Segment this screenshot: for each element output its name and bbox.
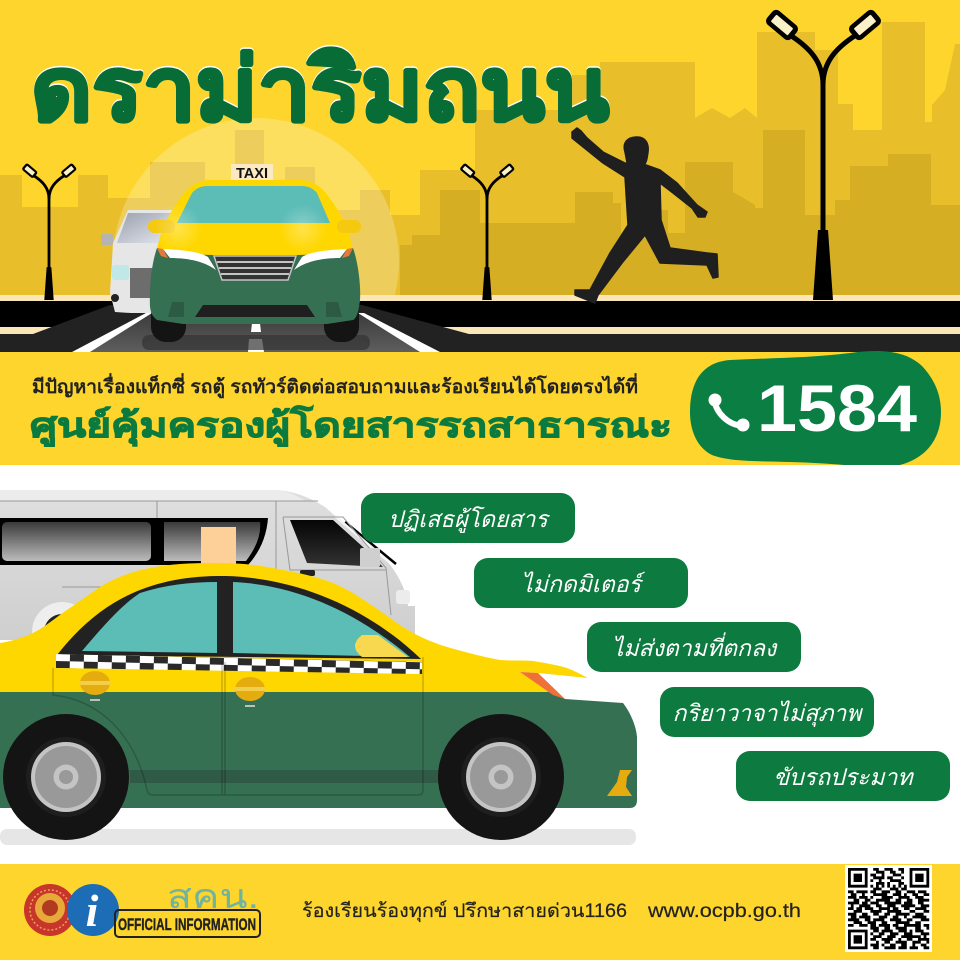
complaint tag: no meter: [474, 558, 688, 608]
taxi yellow upper body: [0, 563, 588, 694]
panel: complaints section: [0, 465, 960, 864]
taxi roof sign: TAXI: [236, 166, 268, 182]
taxi headlights: [157, 248, 353, 270]
hotline footer text: ร้องเรียนร้องทุกข์ ปรึกษาสายด่วน1166: [302, 900, 627, 923]
front window: [233, 582, 410, 657]
taxi orange indicator: [520, 672, 565, 699]
taxi front view: [142, 164, 370, 350]
icon: phone: [708, 394, 750, 432]
taxi grille: [214, 256, 296, 280]
logo: agency initials: สคน.: [167, 878, 259, 916]
logo: red seal: [24, 884, 76, 936]
taxi bumper vent: [195, 305, 315, 317]
complaint tag: impolite: กริยาวาจาไม่สุภาพ: [673, 700, 863, 727]
taxi wheels: [151, 300, 359, 342]
taxi side mirrors: [148, 220, 361, 233]
panel: footer: [0, 864, 960, 960]
sill band: [130, 770, 440, 783]
complaint tag: impolite: [660, 687, 874, 737]
complaint tag: no meter: ไม่กดมิเตอร์: [521, 571, 646, 597]
taxi roof sign: [231, 164, 273, 182]
taxi fog vents: [168, 302, 342, 317]
door handles: [79, 671, 266, 707]
side view taxi: [0, 563, 637, 840]
wing mirror: [355, 635, 408, 657]
panel: hotline band: [0, 351, 960, 467]
logo: official information stamp: [115, 910, 260, 937]
complaint tag: reckless driving: [736, 751, 950, 801]
agency name: ศูนย์คุ้มครองผู้โดยสารรถสาธารณะ: [30, 405, 672, 447]
taxi windshield: [177, 186, 330, 223]
logo: official information stamp: OFFICIAL INFORMATION: [118, 915, 256, 934]
hotline number: 1584: [757, 371, 917, 445]
ground shadow: [0, 829, 636, 845]
taxi hood glow: [154, 204, 327, 252]
street lamp large right: [764, 8, 883, 300]
rear window: [82, 582, 217, 653]
taxi green lower body: [0, 692, 637, 808]
hotline intro text: มีปัญหาเรื่องแท็กซี่ รถตู้ รถทัวร์ติดต่อสอบถามและร้องเรียนได้โดยตรงได้ที่: [32, 373, 638, 399]
door outlines: [53, 657, 423, 795]
checker strip: [56, 654, 422, 674]
front bumper marker: [607, 770, 632, 796]
panel: hero street scene: [0, 0, 960, 352]
taxi yellow upper body: [157, 180, 353, 270]
logo: blue info circle: [67, 884, 119, 936]
rear wheel: [3, 714, 129, 840]
sun glow: [113, 118, 399, 302]
website: www.ocpb.go.th: [647, 901, 801, 922]
street lamp left: [21, 163, 77, 300]
complaint tag: wrong destination: [587, 622, 801, 672]
complaint tag: refuse passengers: ปฏิเสธผู้โดยสาร: [388, 506, 550, 533]
city skyline: [0, 22, 960, 300]
complaint tag: wrong destination: ไม่ส่งตามที่ตกลง: [612, 632, 778, 661]
van behind taxi: [101, 210, 176, 313]
window frame: [57, 576, 421, 659]
hotline badge: [690, 351, 941, 467]
street lamp middle: [459, 163, 515, 300]
side view van: [0, 490, 415, 662]
logo: blue info circle: i: [86, 885, 99, 936]
title: ดราม่าริมถนน: [31, 40, 609, 139]
taxi shadow: [142, 335, 370, 350]
title: ดราม่าริมถนน: [31, 38, 609, 138]
front wheel: [438, 714, 564, 840]
QR code: [845, 865, 932, 952]
taxi green lower body: [150, 248, 360, 324]
pavement and road: [0, 295, 960, 352]
complaint tag: reckless driving: ขับรถประมาท: [773, 764, 914, 790]
complaint tag: refuse passengers: [361, 493, 575, 543]
running man silhouette: [572, 128, 718, 303]
